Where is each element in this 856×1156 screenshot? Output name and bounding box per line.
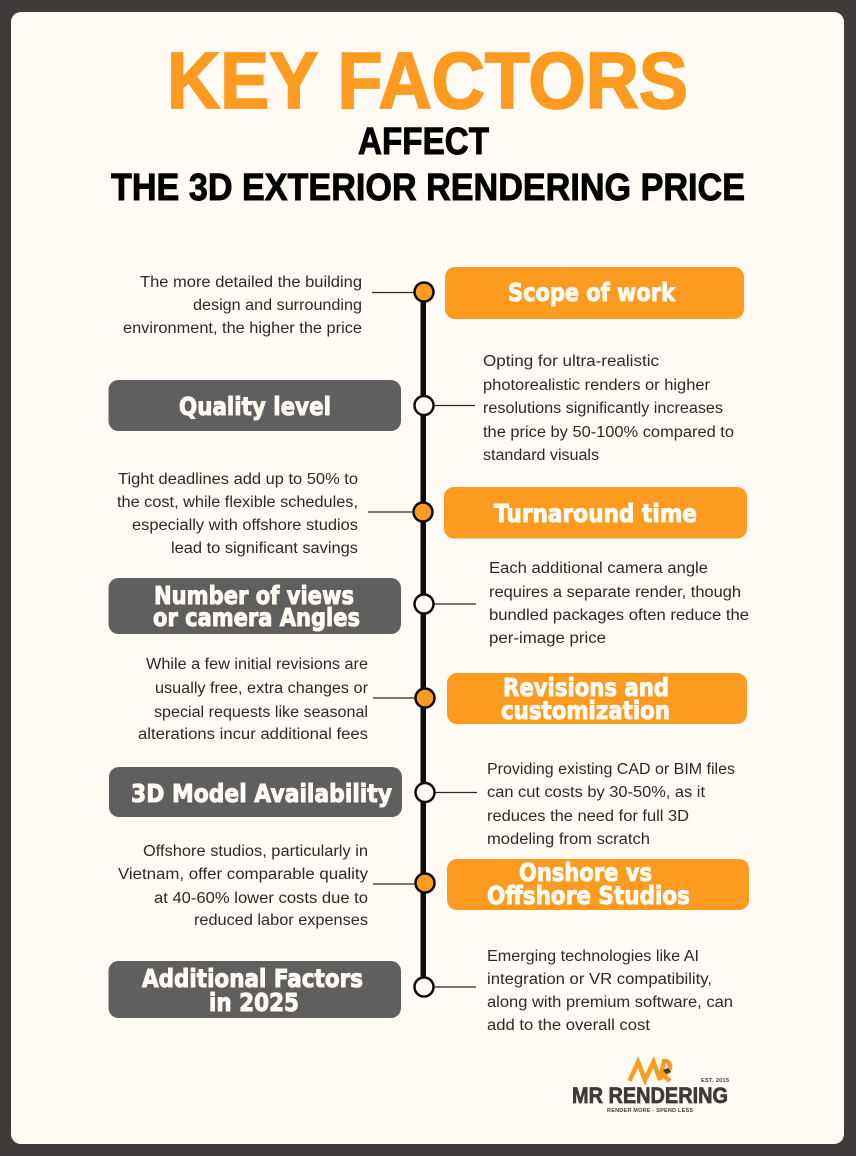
heading: in 2025 [209,988,299,1017]
description: Emerging technologies like AI [487,948,699,965]
heading [142,964,363,1017]
description: The more detailed the building [140,274,362,291]
heading: Scope of work [508,278,676,307]
item 6: 3D model availability [109,761,735,848]
logo: MR Rendering [572,1061,729,1114]
description [483,353,734,464]
description: standard visuals [483,447,599,464]
description: Tight deadlines add up to 50% to [118,471,358,488]
item 1: scope of work [123,267,744,337]
description: Providing existing CAD or BIM files [487,761,735,778]
heading box [108,961,401,1018]
item 7: onshore vs offshore [118,843,749,929]
description: photorealistic renders or higher [483,377,710,394]
description: integration or VR compatibility, [487,971,712,988]
description: reduces the need for full 3D [487,808,689,825]
description [123,274,362,337]
description: Each additional camera angle [489,560,708,577]
item 8: additional factors [108,948,733,1034]
heading box [447,859,749,910]
item 3: turnaround time [117,471,747,557]
timeline nodes [414,282,434,996]
description: design and surrounding [193,297,362,314]
description: add to the overall cost [487,1017,651,1034]
description: Opting for ultra-realistic [483,353,659,370]
description: modeling from scratch [487,831,650,848]
heading [501,673,670,725]
heading box [108,380,401,431]
description [487,761,735,848]
title line: AFFECT: AFFECT [358,121,489,163]
description: along with premium software, can [487,994,733,1011]
description: can cut costs by 30-50%, as it [487,784,706,801]
heading: 3D Model Availability [131,779,392,808]
title [111,36,745,209]
heading: Offshore Studios [487,881,690,910]
heading: Number of views [154,581,354,610]
description: usually free, extra changes or [155,680,368,697]
item 2: quality level [108,353,734,464]
description: Vietnam, offer comparable quality [118,866,368,883]
description [489,560,749,647]
heading: Quality level [179,392,331,421]
description: bundled packages often reduce the [489,607,749,624]
item 5: revisions and customization [138,656,747,743]
item 4: number of views [108,560,749,647]
title line: KEY FACTORS: KEY FACTORS [167,36,688,125]
heading: Revisions and [503,673,669,702]
description: environment, the higher the price [123,320,362,337]
timeline spine [420,292,426,987]
title line: subject: THE 3D EXTERIOR RENDERING PRICE [111,167,745,209]
description [487,948,733,1034]
heading: Additional Factors [142,964,363,993]
description: the price by 50-100% compared to [483,424,734,441]
heading box [109,767,402,817]
connector lines [368,292,477,987]
description: reduced labor expenses [194,912,368,929]
heading: Turnaround time [494,499,697,528]
description: especially with offshore studios [132,517,358,534]
description: per-image price [489,630,606,647]
description: special requests like seasonal [154,704,368,721]
description [118,843,368,929]
icon: roof mark [630,1061,671,1081]
description: Offshore studios, particularly in [143,843,368,860]
heading box [447,673,747,724]
description: resolutions significantly increases [483,400,723,417]
logo est. date: EST. 2015 [701,1078,729,1084]
heading box [445,267,744,319]
description: lead to significant savings [171,540,358,557]
description: at 40-60% lower costs due to [154,890,368,907]
heading [153,581,360,632]
description [117,471,358,557]
heading box [444,487,747,538]
heading: customization [501,696,670,725]
description [138,656,368,743]
heading [487,858,690,910]
logo wordmark: MR RENDERING [572,1083,728,1108]
logo tagline: RENDER MORE - SPEND LESS [607,1108,693,1114]
heading: or camera Angles [153,603,360,632]
heading: Onshore vs [519,858,652,887]
description: While a few initial revisions are [146,656,368,673]
description: the cost, while flexible schedules, [117,494,358,511]
heading box [108,578,401,634]
description: alterations incur additional fees [138,726,368,743]
description: requires a separate render, though [489,584,741,601]
